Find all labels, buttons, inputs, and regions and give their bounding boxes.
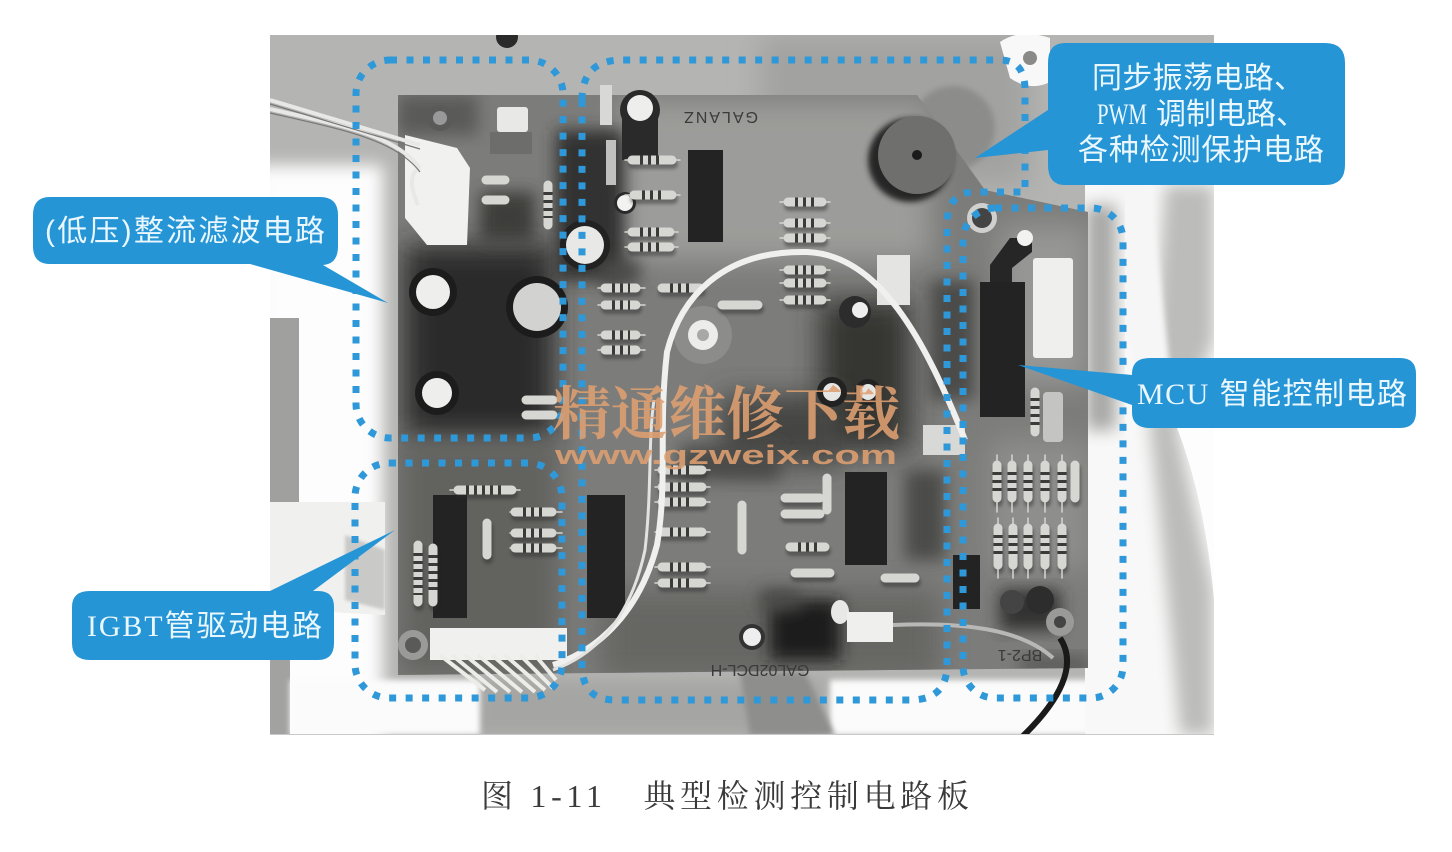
outline: oscillator and protection region <box>582 60 1025 700</box>
sensor and black wires <box>893 624 1053 658</box>
photo bottom edge <box>270 734 1214 735</box>
photo: circuit board <box>255 26 1214 755</box>
white input connector <box>405 135 470 245</box>
callout: oscillator, PWM and protection circuits: PWM <box>1097 98 1147 131</box>
crystal and connectors <box>398 203 1074 692</box>
silkscreen lettering <box>682 108 1042 678</box>
outline: rectifier filter region <box>356 60 563 438</box>
silkscreen lettering: BP2-1 <box>998 646 1042 663</box>
caption: 图 1-11 典型检测控制电路板 <box>481 778 969 814</box>
silkscreen lettering: GALANZ <box>682 108 758 125</box>
white wire loop <box>553 252 965 665</box>
board <box>390 90 1100 690</box>
callout: oscillator, PWM and protection circuits <box>975 43 1345 185</box>
callout: oscillator, PWM and protection circuits: 同步振荡电路、 <box>1092 62 1304 95</box>
watermark title: 精通维修下载 <box>553 382 901 447</box>
callout: rectifier filter circuit <box>33 197 388 303</box>
resistors <box>418 160 1076 606</box>
callout: oscillator, PWM and protection circuits: 各种检测保护电路 <box>1078 134 1324 167</box>
callout: MCU control circuit: MCU 智能控制电路 <box>1137 378 1407 411</box>
watermark <box>553 382 901 470</box>
callout: MCU control circuit <box>1018 358 1416 428</box>
outline: MCU region <box>963 208 1123 698</box>
callout: IGBT driver circuit <box>72 530 395 660</box>
mounting ear <box>1000 34 1050 86</box>
right white housing <box>1085 185 1214 735</box>
outline: IGBT driver region <box>355 463 562 698</box>
callout: oscillator, PWM and protection circuits: 调制电路、 <box>1156 98 1306 131</box>
integrated circuits <box>433 85 1025 618</box>
silkscreen lettering: GAL02DCL-H <box>711 661 809 678</box>
electrolytic capacitors <box>409 90 1054 650</box>
bottom shadow <box>470 680 830 735</box>
callout: IGBT driver circuit: IGBT管驱动电路 <box>87 610 322 643</box>
watermark url: www.gzweix.com <box>553 440 897 470</box>
callout: rectifier filter circuit: (低压)整流滤波电路 <box>45 215 325 248</box>
buzzer <box>868 116 956 202</box>
left white panel <box>255 165 383 755</box>
dotted outlines <box>355 60 1123 700</box>
ribbon cable <box>270 502 385 615</box>
